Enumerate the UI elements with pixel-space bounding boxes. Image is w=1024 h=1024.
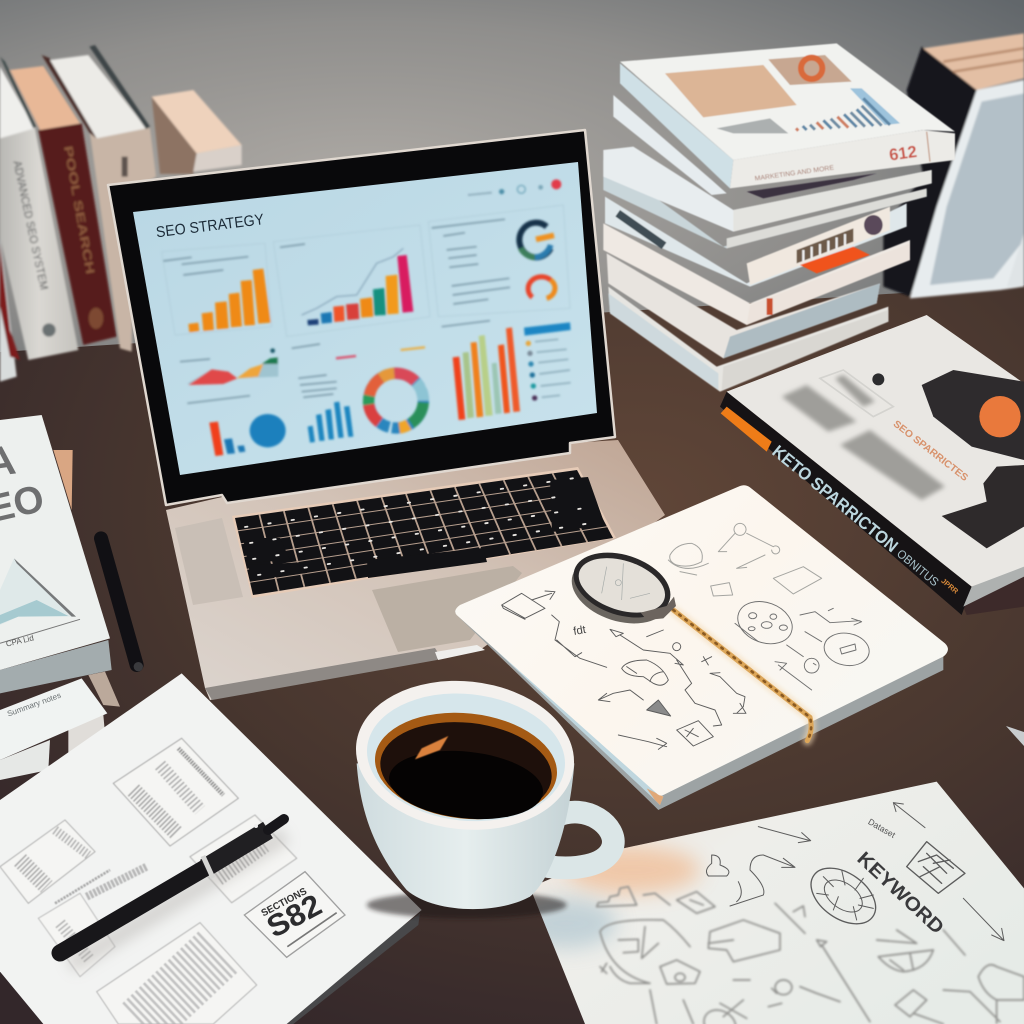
cream book — [42, 45, 156, 352]
dashboard title: SEO STRATEGY — [155, 211, 265, 241]
document sheet with tables — [0, 673, 422, 1024]
spine title: MARKETING AND MORE — [754, 165, 835, 183]
lower left book stack — [0, 415, 143, 780]
upright book far right — [883, 33, 1024, 298]
trackpad — [372, 566, 522, 652]
tall multicolor bars — [453, 327, 520, 420]
cup handle — [548, 812, 613, 868]
wall background — [0, 0, 1024, 370]
legend list — [524, 322, 571, 401]
spine logo: 612 — [888, 142, 918, 165]
orange bar chart — [188, 269, 271, 332]
spine title: KETO SPARRICTON — [768, 441, 902, 556]
pen on paper — [60, 819, 285, 965]
gray hatch block — [717, 118, 788, 133]
coffee cup — [349, 670, 613, 918]
maroon book: POOL SEARCH — [61, 145, 97, 275]
right page sketches — [668, 523, 822, 596]
sketch label: fdt — [572, 624, 588, 638]
mountain icon — [0, 558, 76, 625]
books on left shelf — [0, 45, 242, 382]
orange band — [800, 247, 870, 273]
tan image panel — [665, 65, 797, 117]
small metal object at right edge — [1006, 726, 1024, 746]
tan page behind — [53, 450, 73, 510]
blue bar chart — [308, 402, 353, 443]
cup shadow — [367, 892, 567, 918]
box five — [97, 923, 257, 1024]
doodles sharp — [706, 803, 1004, 941]
doodles soft — [597, 887, 1024, 1024]
silhouette graphic — [942, 465, 1024, 548]
third book with red spine mark — [603, 223, 910, 325]
price box — [244, 872, 345, 957]
box two — [0, 820, 95, 903]
dashboard on screen — [155, 179, 571, 456]
sixth book — [603, 147, 932, 232]
red orange donut — [528, 277, 555, 298]
vinyl record graphic — [922, 370, 1024, 460]
small beige book — [152, 90, 242, 174]
screen — [133, 162, 597, 475]
spine subtitle: OBNITUS — [894, 547, 942, 589]
book stack on right — [603, 43, 955, 392]
laptop lid bezel — [108, 130, 615, 505]
gold chain bookmark — [673, 610, 811, 741]
area chart — [187, 348, 278, 385]
G style donut — [519, 223, 554, 257]
wooden desk surface — [0, 285, 1024, 1024]
book pen — [101, 538, 143, 671]
laptop base — [166, 440, 665, 700]
keyboard — [232, 467, 616, 598]
hardcover book with spine text — [720, 315, 1024, 615]
maroon book — [10, 66, 117, 345]
small red blue bars and pie — [209, 414, 286, 456]
fifth book — [603, 160, 927, 248]
spine text on white book: ADVANCED SEO SYSTEM — [10, 160, 50, 291]
panel outlines — [162, 205, 570, 337]
seventh book — [613, 95, 727, 195]
price label: SECTIONS — [260, 886, 309, 919]
price value: S82 — [261, 888, 327, 945]
book caption: CPA Lid — [5, 633, 35, 649]
box three — [38, 867, 147, 977]
laptop — [108, 130, 665, 700]
tiny top toolbar — [468, 179, 561, 195]
bottom book — [608, 287, 888, 392]
box four — [190, 815, 297, 903]
speaker grille — [175, 518, 243, 605]
cover heading: SEO SPARRICTES — [891, 419, 970, 484]
accent dashes and captions — [163, 219, 510, 403]
spine publisher mark: JPRR — [939, 576, 961, 596]
cup glow on paper — [517, 847, 700, 948]
front notch — [435, 645, 485, 660]
coffee highlight — [415, 736, 448, 759]
loose pages — [0, 672, 120, 780]
pen shadow — [70, 835, 285, 965]
white book — [0, 57, 78, 382]
KEYWORD heading: KEYWORD — [853, 848, 947, 939]
keyword sketch paper — [517, 782, 1024, 1024]
magnifying glass — [563, 541, 679, 635]
cover bar chart — [796, 88, 900, 131]
spiral notebook with sketches — [455, 485, 948, 810]
loose pages: Summary notes — [6, 691, 62, 719]
second book — [607, 253, 880, 358]
cup rim — [349, 670, 581, 840]
coffee — [370, 704, 562, 828]
cup body — [357, 763, 574, 909]
left page sketches — [502, 591, 746, 749]
orange illustration — [768, 55, 852, 85]
top book — [620, 43, 955, 188]
small sketch label: Dataset — [866, 816, 898, 840]
segmented donut — [359, 363, 433, 438]
rising bar chart with trend line — [302, 248, 413, 325]
box one — [113, 738, 238, 846]
cover text blocks — [782, 375, 945, 500]
spine orange label — [721, 407, 772, 452]
fourth book with barcode — [605, 197, 907, 287]
